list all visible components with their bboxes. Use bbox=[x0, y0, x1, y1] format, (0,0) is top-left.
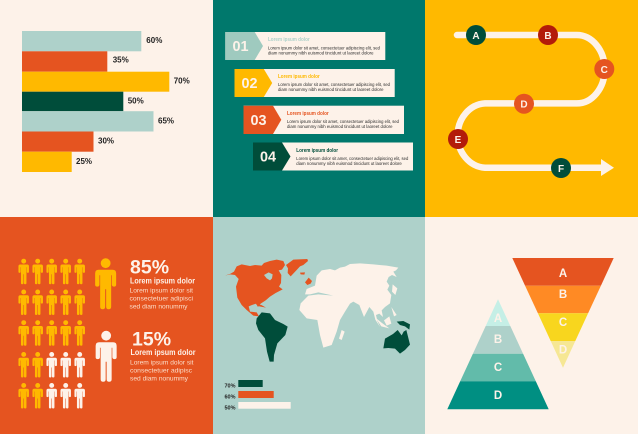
Madagascar bbox=[339, 330, 345, 340]
Greenland bbox=[286, 259, 308, 276]
node E bbox=[448, 129, 468, 149]
bar 30% bbox=[22, 132, 114, 152]
inverted pyramid: C bbox=[559, 317, 567, 329]
bar 35% bbox=[22, 51, 129, 72]
node D: D bbox=[520, 100, 528, 110]
card 04: 04 bbox=[260, 150, 276, 166]
bar 60% bbox=[22, 31, 162, 51]
bar 70%: 70% bbox=[174, 76, 190, 86]
bar 35%: 35% bbox=[113, 56, 129, 64]
people grid bbox=[18, 259, 85, 408]
panel: winding path timeline bbox=[425, 0, 638, 217]
bar 65% bbox=[22, 111, 174, 132]
upright pyramid: C bbox=[494, 362, 502, 374]
upright pyramid: D bbox=[494, 390, 502, 402]
Australia bbox=[383, 330, 410, 354]
card 04: Lorem ipsum dolor bbox=[296, 148, 339, 154]
card 01 bbox=[225, 32, 385, 60]
node A: A bbox=[472, 31, 480, 42]
British Isles bbox=[305, 278, 312, 285]
card 01: Lorem ipsum dolor bbox=[268, 37, 310, 43]
stat 15%: 15% bbox=[132, 328, 171, 350]
inverted pyramid: A bbox=[559, 268, 567, 280]
bar 25%: 25% bbox=[76, 157, 92, 166]
Hudson Bay bbox=[264, 272, 273, 280]
old world map bbox=[299, 263, 410, 354]
card 02: 02 bbox=[242, 76, 258, 92]
Eurasia and Africa bbox=[299, 263, 398, 348]
panel: pyramids bbox=[425, 217, 638, 434]
card 02 bbox=[234, 69, 395, 97]
legend: 50% bbox=[224, 406, 236, 412]
bar 25% bbox=[22, 152, 92, 172]
bar 50%: 50% bbox=[128, 96, 144, 105]
legend: 60% bbox=[224, 394, 236, 400]
legend bbox=[224, 380, 291, 412]
inverted pyramid: D bbox=[559, 344, 567, 356]
inverted pyramid bbox=[512, 258, 614, 368]
panel: horizontal bar chart bbox=[0, 0, 213, 217]
icon: large white person bbox=[96, 331, 117, 382]
card 04 bbox=[253, 142, 413, 170]
panel: numbered list bbox=[213, 0, 425, 217]
South America bbox=[256, 312, 288, 362]
card 01: 01 bbox=[232, 39, 249, 55]
stat 15%: consectetuer adipisc bbox=[130, 368, 193, 375]
panel: world map bbox=[213, 217, 425, 434]
bar 70% bbox=[22, 72, 190, 92]
upright pyramid: B bbox=[494, 334, 502, 346]
stat 85%: Lorem ipsum dolor sit bbox=[130, 288, 193, 295]
bar 60%: 60% bbox=[146, 36, 162, 45]
node C bbox=[594, 59, 614, 79]
arrow head bbox=[601, 159, 614, 176]
upright pyramid bbox=[447, 299, 549, 409]
New Guinea bbox=[397, 321, 410, 330]
card 02: Lorem ipsum dolor bbox=[278, 74, 320, 80]
node E: E bbox=[455, 135, 462, 146]
Caribbean islands bbox=[255, 304, 266, 308]
Iceland bbox=[300, 272, 305, 275]
node F bbox=[551, 158, 571, 178]
card 03: 03 bbox=[250, 113, 267, 129]
stat 85%: sed diam nonummy bbox=[130, 304, 188, 311]
legend: 70% bbox=[224, 384, 236, 390]
stat 15%: Lorem ipsum dolor sit bbox=[130, 360, 194, 367]
North America bbox=[225, 260, 285, 316]
node A bbox=[466, 25, 486, 45]
stat 85% bbox=[130, 256, 195, 311]
card 03: Lorem ipsum dolor bbox=[287, 111, 329, 117]
winding path bbox=[457, 35, 605, 168]
bar 30%: 30% bbox=[98, 136, 114, 146]
stat 85%: consectetuer adipisci bbox=[130, 296, 193, 303]
bar 50% bbox=[22, 92, 144, 111]
card 03 bbox=[244, 106, 404, 134]
Southeast Asian islands bbox=[375, 307, 397, 328]
stat 85%: Lorem ipsum dolor bbox=[130, 276, 195, 285]
node B: B bbox=[544, 31, 552, 42]
inverted pyramid: B bbox=[559, 289, 567, 301]
icon: large yellow person bbox=[95, 258, 116, 309]
node F: F bbox=[558, 164, 564, 175]
stat 85%: 85% bbox=[130, 256, 169, 278]
node B bbox=[538, 25, 558, 45]
stat 15%: Lorem ipsum dolor bbox=[130, 348, 196, 357]
panel: people statistics bbox=[0, 217, 213, 434]
stat 15%: sed diam nonummy bbox=[130, 376, 189, 383]
stat 15% bbox=[130, 328, 196, 383]
node D bbox=[514, 94, 534, 114]
americas map bbox=[225, 259, 308, 362]
node C: C bbox=[601, 65, 608, 76]
upright pyramid: A bbox=[494, 313, 502, 325]
Japan bbox=[392, 284, 397, 295]
bar 65%: 65% bbox=[158, 116, 174, 125]
